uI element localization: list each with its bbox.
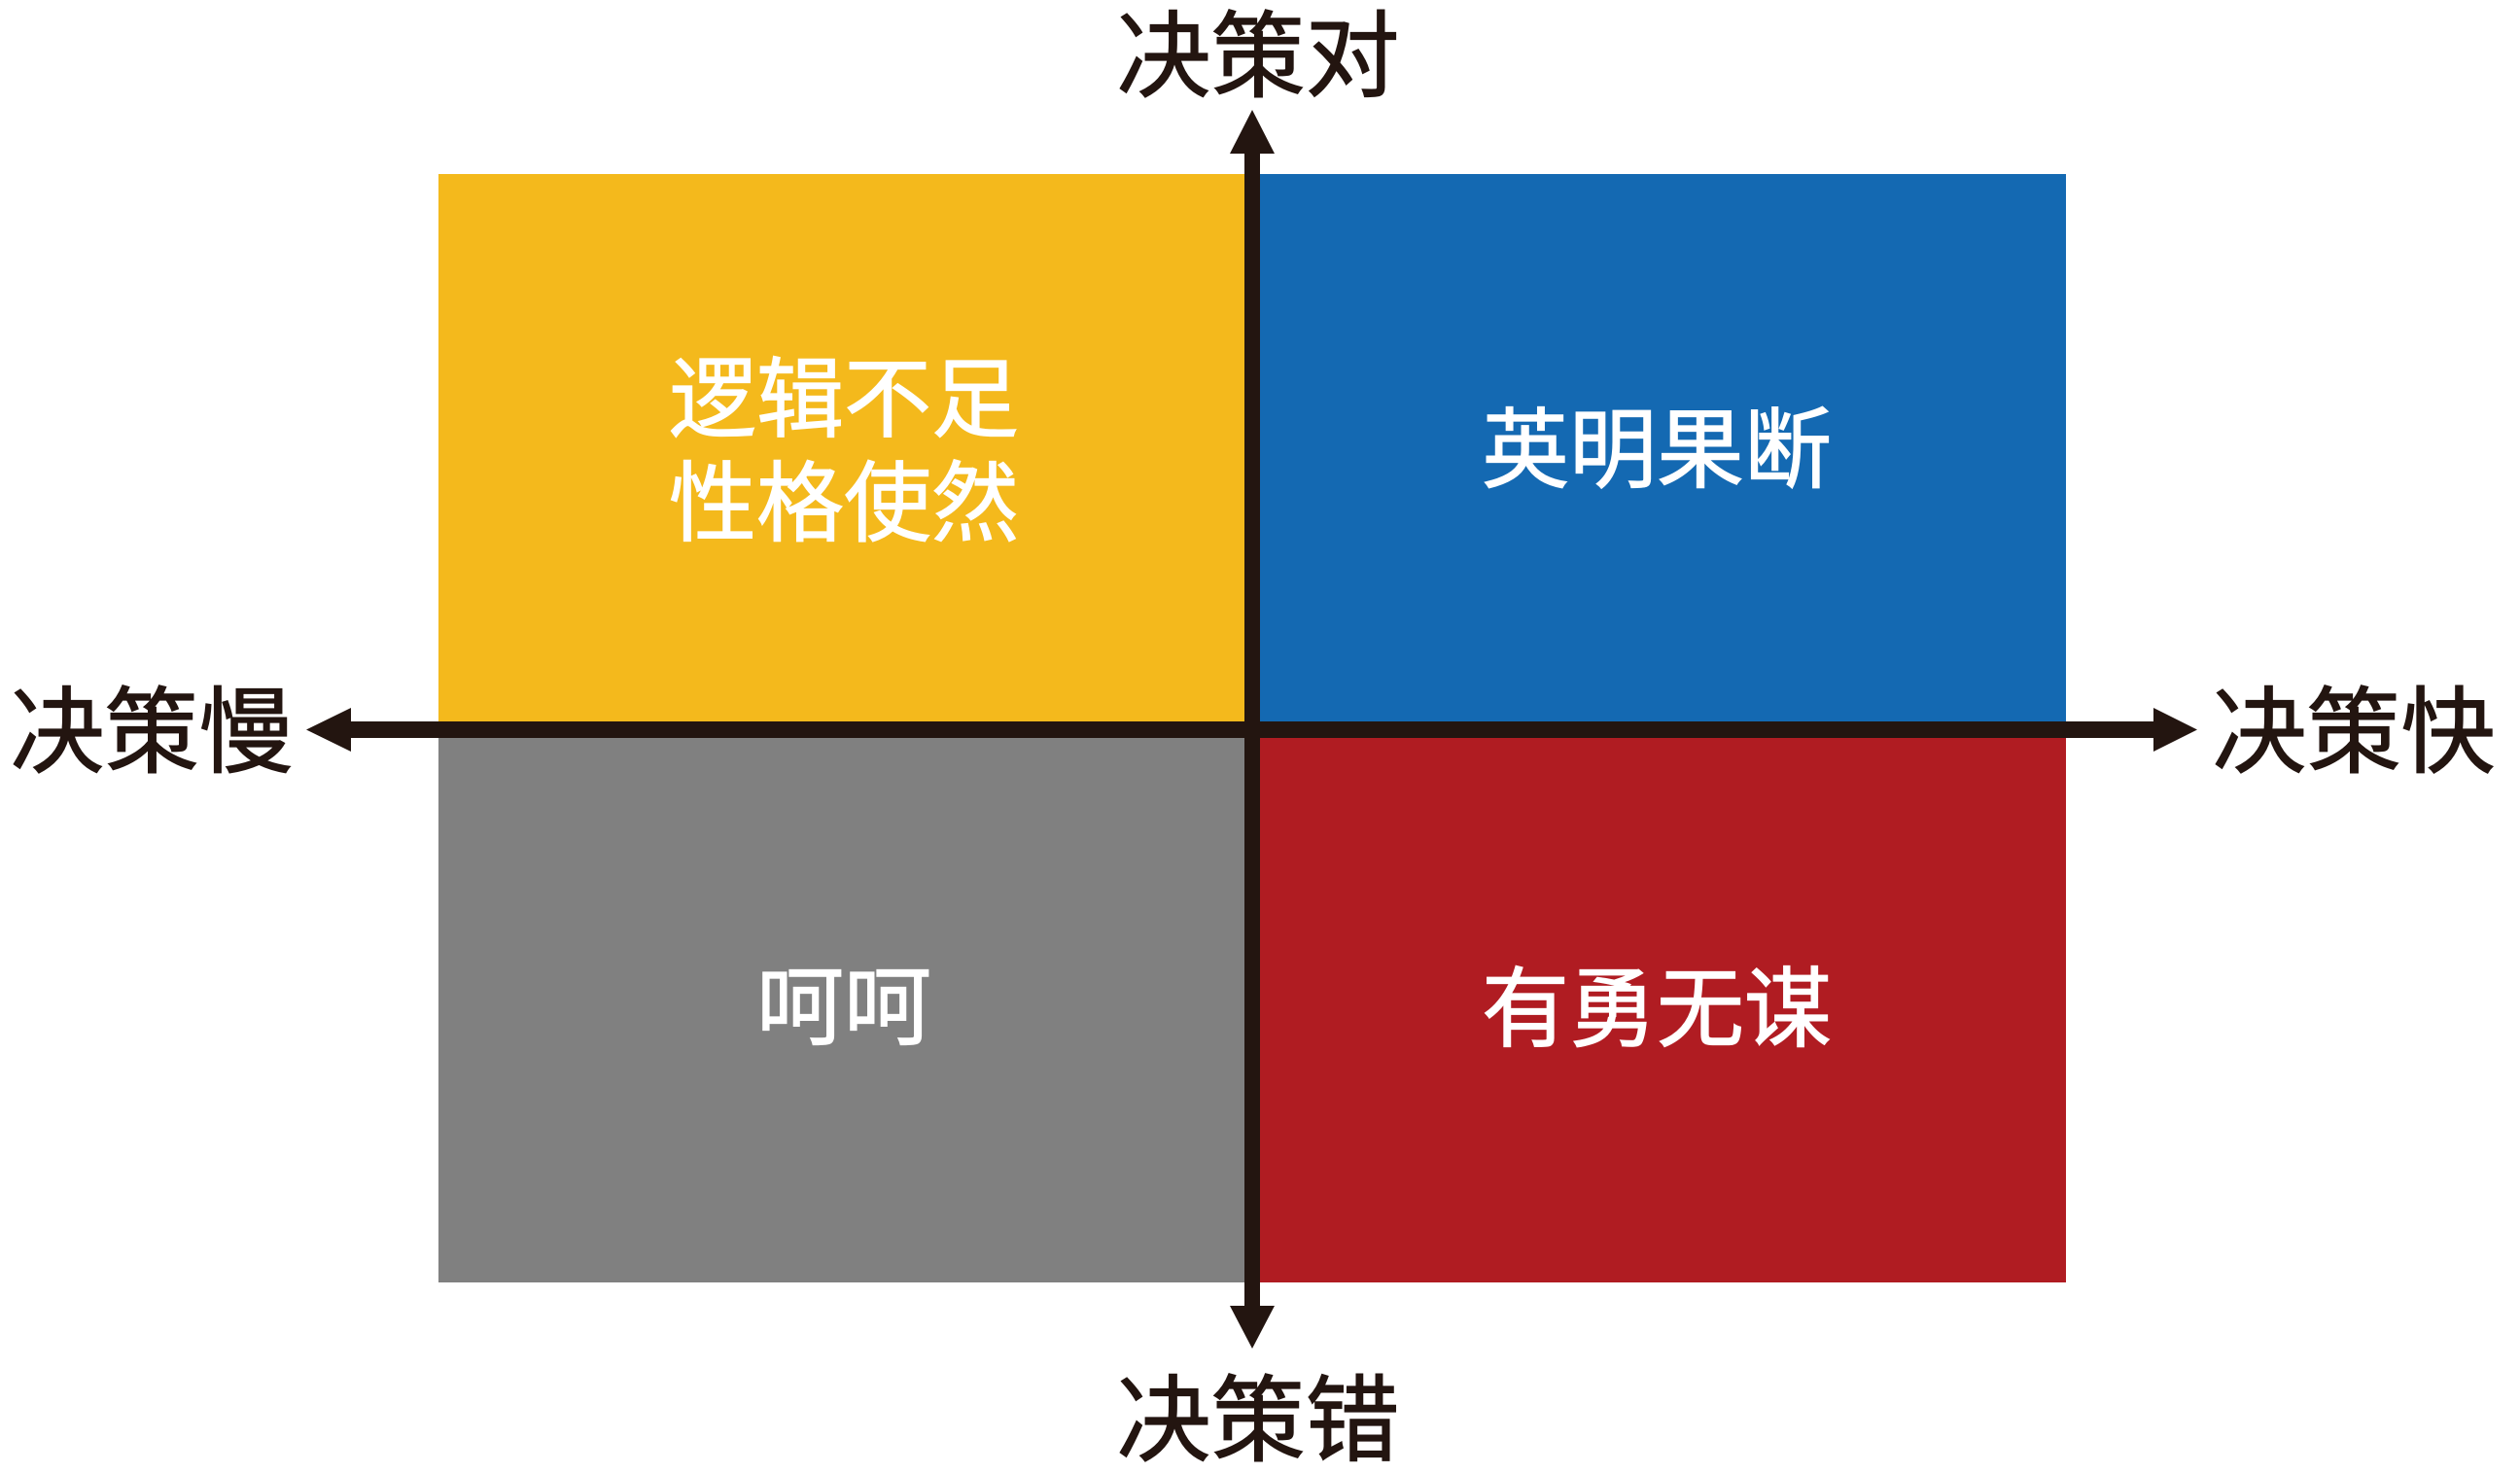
- panel: top-right blue quadrant: [1252, 174, 2066, 729]
- arrow: vertical axis: [1230, 110, 1275, 1349]
- text: 逻辑不足 性格使然: 逻辑不足: [669, 352, 1019, 449]
- text: 逻辑不足 性格使然: 性格使然: [669, 456, 1019, 553]
- panel: bottom-right red quadrant: [1252, 729, 2066, 1282]
- panel: top-left yellow quadrant: [438, 174, 1252, 729]
- label: left axis 决策慢: 决策慢: [10, 680, 294, 786]
- label: right axis 决策快: 决策快: [2213, 680, 2495, 786]
- arrow: horizontal axis: [306, 708, 2197, 752]
- text: 有勇无谋: 有勇无谋: [1482, 962, 1832, 1059]
- text: 呵呵: 呵呵: [756, 960, 931, 1057]
- panel: bottom-left gray quadrant: [438, 729, 1252, 1282]
- text: 英明果断: 英明果断: [1482, 403, 1832, 500]
- label: bottom axis 决策错: 决策错: [1116, 1368, 1400, 1473]
- label: top axis 决策对: 决策对: [1116, 4, 1400, 110]
